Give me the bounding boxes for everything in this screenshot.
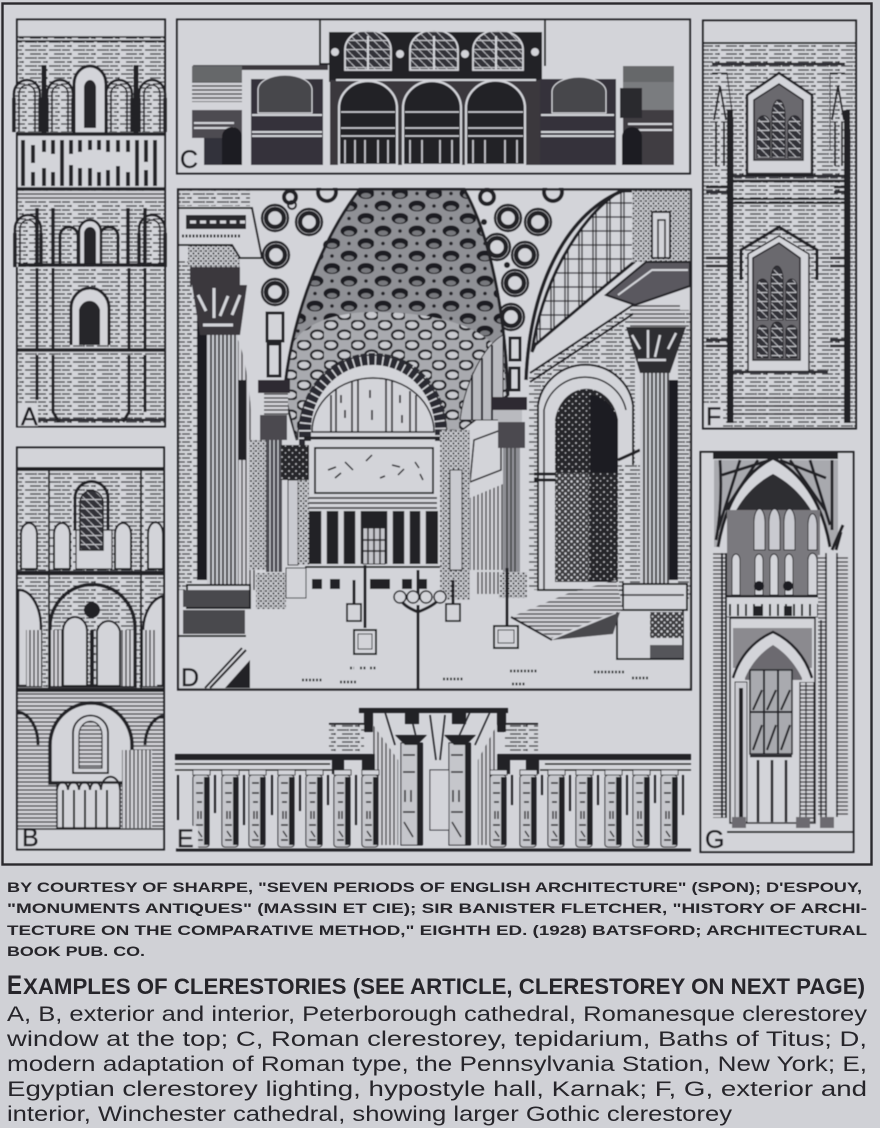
frieze panel D [304,440,441,510]
outer frame [2,4,872,864]
panel C: Roman clerestory [177,19,690,174]
heading: XAMPLES OF CLERESTORIES (SEE ARTICLE, CLERESTOREY ON NEXT PAGE) [23,974,865,999]
left entablature D [178,190,262,258]
upper arcade A [14,65,165,134]
left base D [178,585,251,688]
panel A: Peterborough cathedral exterior [14,20,165,431]
right capital D [606,262,690,373]
parapet G [725,597,822,617]
lower arches C [330,80,542,165]
panel B: Peterborough cathedral interior [17,448,164,852]
base line E [176,848,691,852]
lunette window D [304,359,441,445]
lower arcade A [15,208,165,267]
description text: A, B, exterior and interior, Peterborough cathedral, Romanesque clerestorey [7,1003,868,1026]
mid-left pier D [249,380,309,609]
description text [6,1003,868,1126]
panel D: Pennsylvania Station [178,183,691,692]
right wall and arch D [528,303,640,590]
lower window F [733,227,845,414]
label A: A [21,403,38,431]
credits text: "MONUMENTS ANTIQUES" (MASSIN ET CIE); SIR BANISTER FLETCHER, "HISTORY OF ARCHI- [7,900,867,916]
description text: interior, Winchester cathedral, showing larger Gothic clerestorey [7,1103,733,1126]
panel F: Winchester cathedral exterior [703,20,856,431]
hanging shadows E [178,775,683,825]
credits text: BY COURTESY OF SHARPE, "SEVEN PERIODS OF ENGLISH ARCHITECTURE" (SPON); D'ESPOUY, [7,879,862,895]
middle tier arches B [18,585,163,690]
mid-right bay D [440,335,527,600]
door G [730,618,815,823]
right column D [640,310,690,600]
colonnade D [304,510,441,590]
panel D border [178,190,691,690]
label E: E [177,825,194,853]
upper window F [733,73,848,203]
engravings [14,19,856,854]
label B: B [22,824,39,852]
credits text [7,879,868,959]
staircase D [511,580,623,640]
side rooms C [192,65,674,165]
floor marks D [302,668,648,684]
description text: modern adaptation of Roman type, the Pennsylvania Station, New York; E, [7,1053,867,1076]
pylon E [329,708,538,845]
label C: C [180,146,198,174]
buttresses F [706,73,850,423]
entablature E [175,754,691,774]
label D: D [181,664,199,692]
lower tier B [18,692,163,829]
label F: F [706,403,721,431]
vault G [713,452,838,547]
label G: G [705,826,724,854]
central columns E [395,735,476,845]
credits text: BOOK PUB. CO. [7,943,145,959]
description text: window at the top; C, Roman clerestorey, tepidarium, Baths of Titus; D, [6,1028,867,1051]
clerestory window D [526,190,690,380]
credits text: TECTURE ON THE COMPARATIVE METHOD," EIGHTH ED. (1928) BATSFORD; ARCHITECTURAL [7,922,868,938]
top tier openings B [18,482,163,573]
vault spandrels D [250,183,562,400]
panel G: Winchester cathedral interior [700,452,854,854]
left capital D [188,245,247,335]
window A [18,268,164,422]
coffered dome D [284,189,508,440]
upper windows C [329,30,542,82]
footing G [727,817,853,832]
side shafts G [713,525,848,818]
panel E: hypostyle hall, Karnak [175,708,691,853]
description text: Egyptian clerestorey lighting, hypostyle hall, Karnak; F, G, exterior and [7,1078,867,1101]
left wall and column D [178,260,256,590]
striped band A [18,137,164,201]
heading: E [7,970,22,1000]
lamps and pedestals D [347,565,518,690]
right base D [617,584,687,659]
columns E [193,770,678,847]
label D [182,668,199,687]
upper window G [727,509,822,596]
